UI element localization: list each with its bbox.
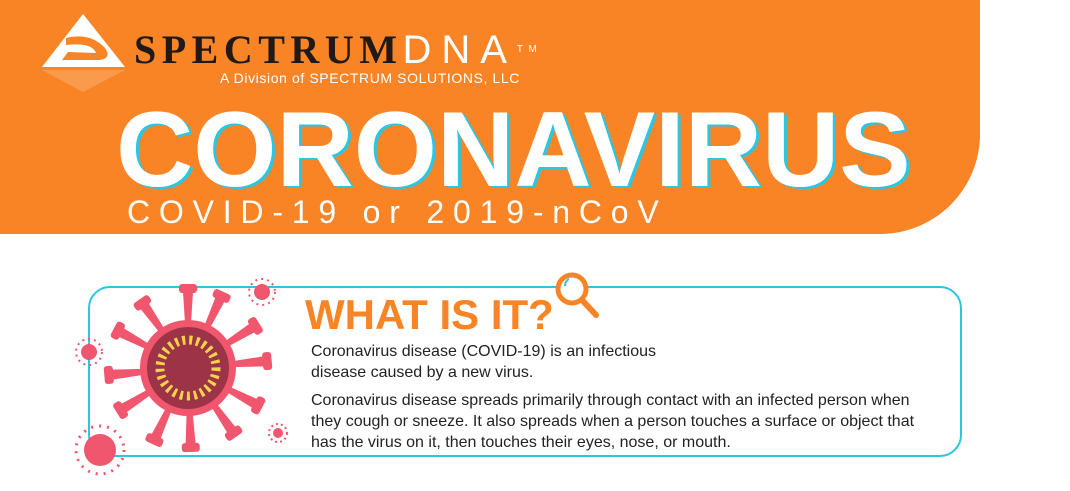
icon: logo triangle: [42, 14, 125, 92]
brand name: SPECTRUMDNATM: [134, 27, 542, 72]
logo: [42, 14, 542, 92]
panel: what is it: [88, 286, 962, 457]
text block: Coronavirus disease (COVID-19) is an infectious: [311, 343, 656, 360]
icon: magnifier: [556, 272, 599, 318]
header banner: [0, 0, 980, 234]
small viruses: [249, 279, 275, 305]
tagline: A Division of SPECTRUM SOLUTIONS, LLC: [220, 70, 520, 86]
text block: [311, 343, 914, 451]
main virus spikes: [104, 284, 272, 452]
heading: WHAT IS IT?: [305, 291, 554, 338]
text block: disease caused by a new virus.: [311, 364, 533, 381]
subtitle: COVID-19 or 2019-nCoV: [127, 194, 668, 230]
text block: Coronavirus disease spreads primarily through contact with an infected person when they cough or sneeze. It also spreads when a person touches a surface or object that has the virus on it, then touches their eyes, nose, or mouth.: [311, 392, 914, 451]
title: CORONAVIRUS: [116, 89, 911, 209]
icon: virus illustration: [74, 278, 288, 476]
